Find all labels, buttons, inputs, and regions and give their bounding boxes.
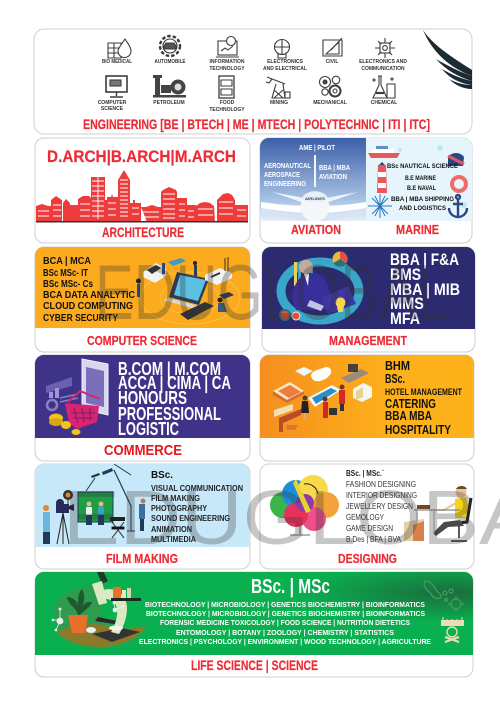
text: management courses (390, 253, 460, 324)
text: designing courses: INTERIOR DESIGNING (346, 491, 417, 500)
text: designing courses: BSc. | MSc.` (346, 469, 384, 478)
panel: hospitality (260, 355, 474, 461)
text: film courses: BSc. (151, 470, 173, 481)
text: management courses: BMS (390, 265, 421, 284)
label: electronics and communication: ELECTRONICS AND (359, 59, 407, 65)
text: computer science courses: CYBER SECURITY (43, 313, 118, 324)
text: designing courses: GAME DESIGN (346, 524, 393, 533)
text: hospitality courses: BBA MBA (385, 408, 432, 423)
text: hospitality courses: BHM (385, 358, 410, 373)
text: marine courses: BSc NAUTICAL SCIENCE (387, 163, 459, 170)
label: civil: CIVIL (326, 59, 338, 65)
text: science courses: BIOTECHNOLOGY | MICROBIOLOGY | GENETICS BIOCHEMISTRY | BIOINFORMATICS (145, 600, 425, 609)
illustration: hotel items (273, 364, 372, 432)
icon: civil (323, 38, 342, 56)
text: hospitality courses: CATERING (385, 396, 436, 411)
text: aviation courses: AVIATION (319, 174, 347, 181)
panel: engineering (34, 29, 472, 134)
text: aviation courses: BBA | MBA (319, 165, 350, 172)
text: designing courses: GEMOLOGY (346, 513, 385, 522)
label: architecture: ARCHITECTURE (102, 225, 184, 240)
text: hospitality courses: HOTEL MANAGEMENT (385, 387, 462, 397)
icon: electronics and electrical (274, 40, 290, 58)
panel: aviation and marine (260, 138, 472, 243)
text: designing courses: JEWELLERY DESIGN (346, 502, 413, 511)
illustration: film set (43, 464, 146, 544)
text: marine courses (387, 163, 459, 212)
label: aviation: AVIATION (291, 222, 341, 237)
label: electronics and electrical: AND ELECTRICAL (263, 66, 307, 72)
icon: chemical flasks (373, 76, 395, 98)
text: management courses: MMS (390, 294, 424, 313)
panel: aviation image (260, 138, 366, 222)
panel: marine image (366, 138, 472, 221)
heading: architecture degrees: D.ARCH|B.ARCH|M.ARCH (47, 147, 236, 166)
label: computer science: SCIENCE (101, 106, 124, 112)
label: mechanical: MECHANICAL (313, 100, 347, 106)
panel: life science (35, 571, 473, 677)
text: science courses: ELECTRONICS | PSYCHOLOGY | ENVIRONMENT | WOOD TECHNOLOGY | AGRICULTURE (139, 637, 431, 646)
text: aviation courses: AEROSPACE (264, 172, 300, 179)
text: commerce courses (118, 359, 231, 439)
text: film courses (151, 470, 243, 544)
icon: mechanical gears (320, 76, 340, 96)
text: film courses: PHOTOGRAPHY (151, 504, 208, 513)
text: hospitality courses (385, 358, 462, 437)
illustration: microscope and plant (52, 571, 146, 647)
icon: information technology (216, 36, 239, 57)
text: commerce courses: B.COM | M.COM (118, 359, 221, 379)
text: science courses: ENTOMOLOGY | BOTANY | ZOOLOGY | CHEMISTRY | STATISTICS (176, 628, 394, 637)
text: aviation courses (264, 145, 350, 188)
text: computer science courses: BSc MSc- Cs (43, 279, 93, 290)
text: computer science courses: CLOUD COMPUTING (43, 301, 133, 312)
text: computer science courses: BCA | MCA (43, 256, 91, 267)
text: aviation courses: AME | PILOT (299, 145, 336, 152)
label: information technology: INFORMATION (210, 59, 245, 65)
text: aviation courses: ENGINEERING (264, 181, 306, 188)
panel: architecture (35, 138, 250, 243)
icon: automobile gear (160, 36, 180, 56)
label: computer science: COMPUTER SCIENCE (87, 333, 197, 348)
label: food technology: TECHNOLOGY (209, 107, 245, 113)
illustration: devices (136, 257, 240, 324)
text: marine courses: AND LOGISTICS (399, 205, 447, 212)
label: computer science: COMPUTER (98, 100, 127, 106)
label: designing: DESIGNING (338, 551, 397, 566)
illustration: manager at desk (280, 252, 359, 320)
text: film courses: MULTIMEDIA (151, 535, 196, 544)
illustration: designer at desk (404, 486, 471, 541)
text: designing courses: FASHION DESIGNING (346, 480, 416, 489)
text: science courses: BSc. | MSc (251, 576, 330, 598)
label: film making: FILM MAKING (106, 551, 178, 566)
illustration: red city skyline (36, 170, 248, 222)
label: mining: MINING (270, 100, 288, 106)
text: hospitality courses: BSc. (385, 371, 405, 386)
text: science courses (139, 576, 431, 646)
text: science courses: BIOTECHNOLOGY | MICROBIOLOGY | GENETICS BIOCHEMISTRY | BIOINFORMATICS (146, 609, 425, 618)
text: film courses: VISUAL COMMUNICATION (151, 484, 243, 493)
text: film courses: ANIMATION (151, 525, 192, 534)
panel: computer science (35, 247, 250, 352)
text: film courses: FILM MAKING (151, 494, 200, 503)
illustration: colour splash (270, 475, 339, 535)
text: management courses: MBA | MIB (390, 280, 460, 299)
text: management courses: MFA (390, 309, 420, 328)
text: designing courses: B.Des | BFA | BVA (346, 535, 402, 544)
label: food technology: FOOD (220, 100, 235, 106)
icon: mining (266, 77, 290, 98)
panel: designing (260, 464, 474, 569)
icon: bio medical (108, 39, 131, 58)
label: automobile: AUTOMOBILE (154, 59, 186, 65)
panel: management (262, 247, 475, 352)
text: aviation courses: AERONAUTICAL (264, 163, 312, 170)
label: electronics and electrical: ELECTRONICS (267, 59, 304, 65)
panel: film making (35, 464, 250, 569)
label: petroleum: PETROLEUM (153, 100, 185, 106)
icon: wing logo (423, 30, 472, 89)
text: marine courses: B.E MARINE (405, 175, 437, 182)
illustration: phone and shopping basket (46, 359, 108, 435)
text: commerce courses: HONOURS (118, 388, 187, 408)
text: science courses: FORENSIC MEDICINE TOXICOLOGY | FOOD SCIENCE | NUTRITION DIETETICS (160, 618, 410, 627)
text: commerce courses: ACCA | CIMA | CA (118, 373, 231, 393)
text: management courses: BBA | F&A (390, 250, 459, 269)
text: commerce courses: PROFESSIONAL (118, 404, 221, 424)
text: film courses: SOUND ENGINEERING (151, 514, 230, 523)
text: designing courses (346, 469, 417, 544)
text: computer science courses: BSc MSc- IT (43, 268, 88, 279)
label: management: MANAGEMENT (329, 333, 407, 348)
panel: commerce (35, 355, 250, 461)
label: marine: MARINE (396, 222, 439, 237)
text: marine courses: BBA | MBA SHIPPING (391, 196, 454, 203)
text: computer science courses (43, 256, 135, 324)
text: marine courses: B.E NAVAL (407, 185, 436, 192)
icon: computer science (106, 76, 127, 97)
icon: electronics and communication (375, 38, 395, 58)
label: life science: LIFE SCIENCE | SCIENCE (191, 657, 318, 673)
text: commerce courses: LOGISTIC (118, 419, 179, 439)
label: commerce: COMMERCE (104, 442, 182, 459)
label: information technology: TECHNOLOGY (209, 66, 245, 72)
panel: aviation image: AIRLINES (305, 196, 325, 201)
icon: petroleum pump (153, 75, 186, 98)
text: hospitality courses: HOSPITALITY (385, 422, 451, 437)
icon: bacteria and sawmill emblem (424, 581, 464, 642)
label: electronics and communication: COMMUNICATION (361, 66, 405, 72)
text: computer science courses: BCA DATA ANALYTIC (43, 290, 135, 301)
label: bio medical: BIO MEDICAL (102, 59, 132, 65)
label: chemical: CHEMICAL (371, 100, 397, 106)
icon: food technology (219, 76, 234, 98)
